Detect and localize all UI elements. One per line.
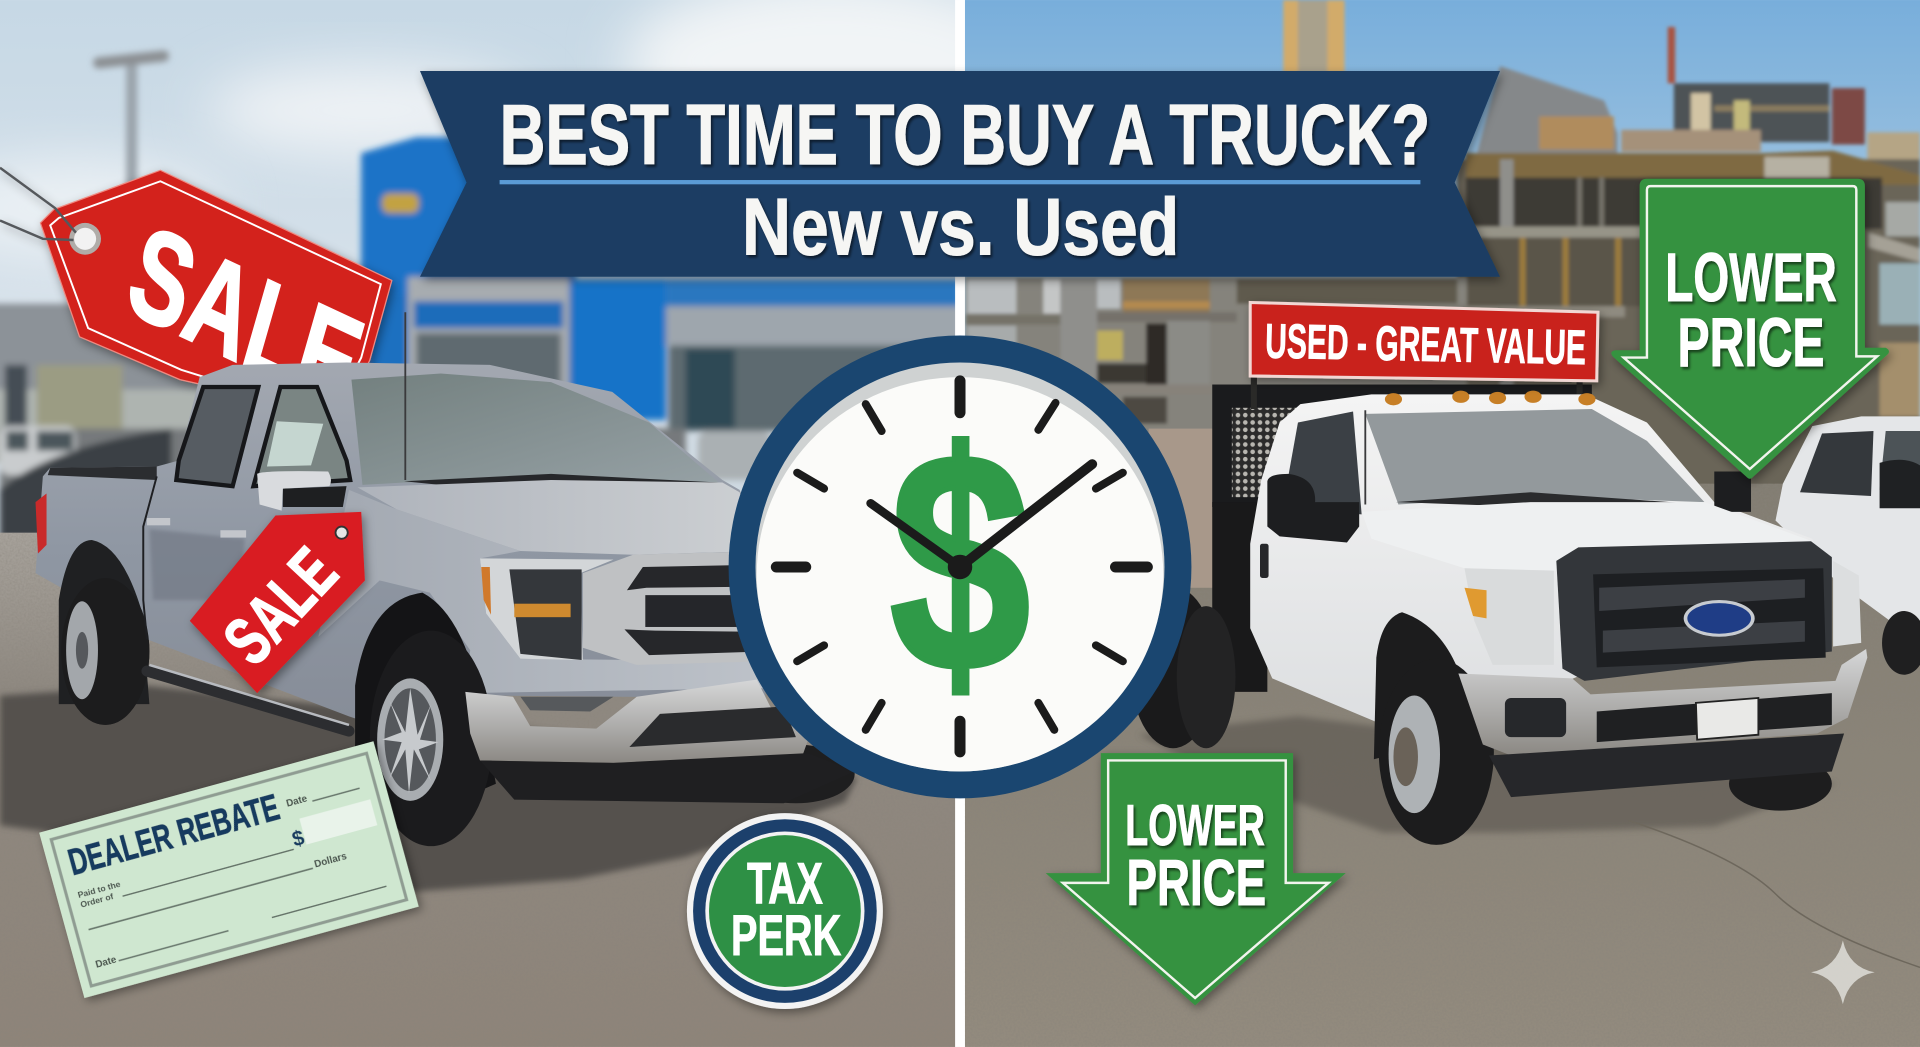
dealership sky	[0, 0, 1041, 539]
bed rail	[48, 467, 157, 480]
door handle	[1260, 544, 1269, 578]
front grille	[1556, 541, 1832, 681]
right headlight sliver	[1833, 561, 1861, 647]
check writing lines	[71, 788, 387, 966]
panel: used truck construction scene	[965, 0, 1920, 1047]
small tag eyelet	[336, 527, 348, 539]
running board	[147, 671, 349, 731]
badge text perk: PERK	[731, 904, 842, 968]
clock with dollar sign	[729, 336, 1191, 798]
tail light	[36, 494, 47, 554]
side reflections	[149, 529, 245, 600]
front wheel	[1374, 612, 1494, 845]
green arrow: lower price bottom	[1046, 753, 1346, 1005]
check date label: Date	[285, 793, 309, 810]
rack frame	[1212, 385, 1592, 507]
lower black valance	[480, 753, 855, 803]
used great value sign	[1250, 302, 1598, 381]
center divider	[955, 0, 965, 1047]
background white truck	[1776, 416, 1920, 675]
concrete wall	[1149, 429, 1215, 588]
badge text tax: TAX	[747, 852, 823, 917]
far wheel	[1729, 757, 1832, 811]
side windows	[176, 387, 258, 486]
check order label: Order of	[79, 891, 114, 909]
tax perk badge	[687, 813, 883, 1009]
crane tower	[1283, 0, 1344, 74]
lower intake	[1597, 693, 1832, 742]
construction sky	[965, 0, 1920, 490]
license plate	[1696, 698, 1758, 740]
clock hands	[871, 464, 1092, 579]
rear wheels	[1130, 587, 1216, 748]
rear frame	[1212, 502, 1267, 692]
check heading: DEALER REBATE	[64, 787, 284, 883]
rear wheel	[61, 578, 149, 725]
ford oval emblem	[1684, 600, 1755, 637]
check dollars label: Dollars	[313, 851, 349, 870]
cab and body	[1250, 394, 1827, 735]
subtitle: New vs. Used	[742, 183, 1179, 273]
windshield	[1365, 409, 1704, 505]
title rule	[500, 180, 1420, 184]
tag eyelet	[69, 223, 101, 255]
panel: new truck dealership scene	[0, 0, 1041, 1047]
check payee label: Paid to the	[77, 879, 122, 900]
small red sale tag	[190, 512, 365, 693]
antenna	[404, 312, 406, 480]
clock face	[757, 377, 1163, 771]
door seam and handles	[143, 476, 157, 639]
front wheel arch and wheel	[355, 593, 496, 846]
truck body	[36, 362, 765, 735]
side mirrors	[1267, 471, 1751, 542]
fog lamp	[520, 697, 613, 711]
blurred dealership building	[0, 50, 960, 539]
side mirror	[257, 471, 347, 511]
side window	[1287, 411, 1362, 514]
sign text: USED - GREAT VALUE	[1265, 315, 1587, 375]
rear arch	[59, 540, 149, 704]
clock rim	[729, 336, 1191, 798]
green dollar sign: $	[890, 389, 1030, 737]
lower valance	[1489, 734, 1844, 797]
chrome grille	[583, 551, 765, 665]
far front wheel	[737, 745, 855, 803]
arrow text price: PRICE	[1127, 846, 1266, 919]
hour ticks	[776, 381, 1147, 752]
check dollar sign: $	[290, 826, 307, 851]
sign struts	[1254, 375, 1580, 409]
antenna	[1364, 410, 1366, 505]
blurred construction site	[965, 27, 1920, 490]
fog lamp	[1505, 698, 1566, 737]
amber roof markers	[1385, 391, 1596, 405]
hood	[358, 480, 762, 555]
chrome bumper	[1458, 649, 1867, 756]
windshield	[351, 374, 719, 485]
tag string	[0, 168, 76, 240]
hood	[1362, 502, 1812, 571]
dealer rebate check	[39, 741, 419, 998]
check lower date label: Date	[94, 955, 118, 971]
main title: BEST TIME TO BUY A TRUCK?	[500, 87, 1430, 183]
tag sale text: SALE	[115, 197, 376, 439]
large red sale tag	[0, 168, 392, 439]
small tag sale text: SALE	[209, 533, 352, 679]
green arrow: lower price upper right	[1611, 179, 1889, 479]
headlight	[480, 558, 613, 660]
lot ground	[0, 533, 960, 1047]
window sticker	[267, 421, 323, 467]
chrome bumper	[465, 680, 808, 763]
title banner	[420, 71, 1500, 277]
arrow text lower: LOWER	[1665, 239, 1837, 316]
sparkle watermark	[1811, 940, 1875, 1004]
silver pickup truck	[36, 312, 855, 846]
headlight	[1464, 568, 1554, 665]
bumper intake	[629, 707, 796, 747]
front fender	[318, 490, 765, 693]
arrow text lower: LOWER	[1125, 794, 1265, 858]
arrow text price: PRICE	[1678, 304, 1824, 381]
check amount box	[299, 799, 377, 845]
white truck flatbed	[1130, 375, 1592, 748]
rear rim	[66, 601, 98, 699]
parking lot ground	[965, 484, 1920, 1047]
rack mesh	[1232, 408, 1297, 497]
white work truck	[1250, 391, 1867, 845]
